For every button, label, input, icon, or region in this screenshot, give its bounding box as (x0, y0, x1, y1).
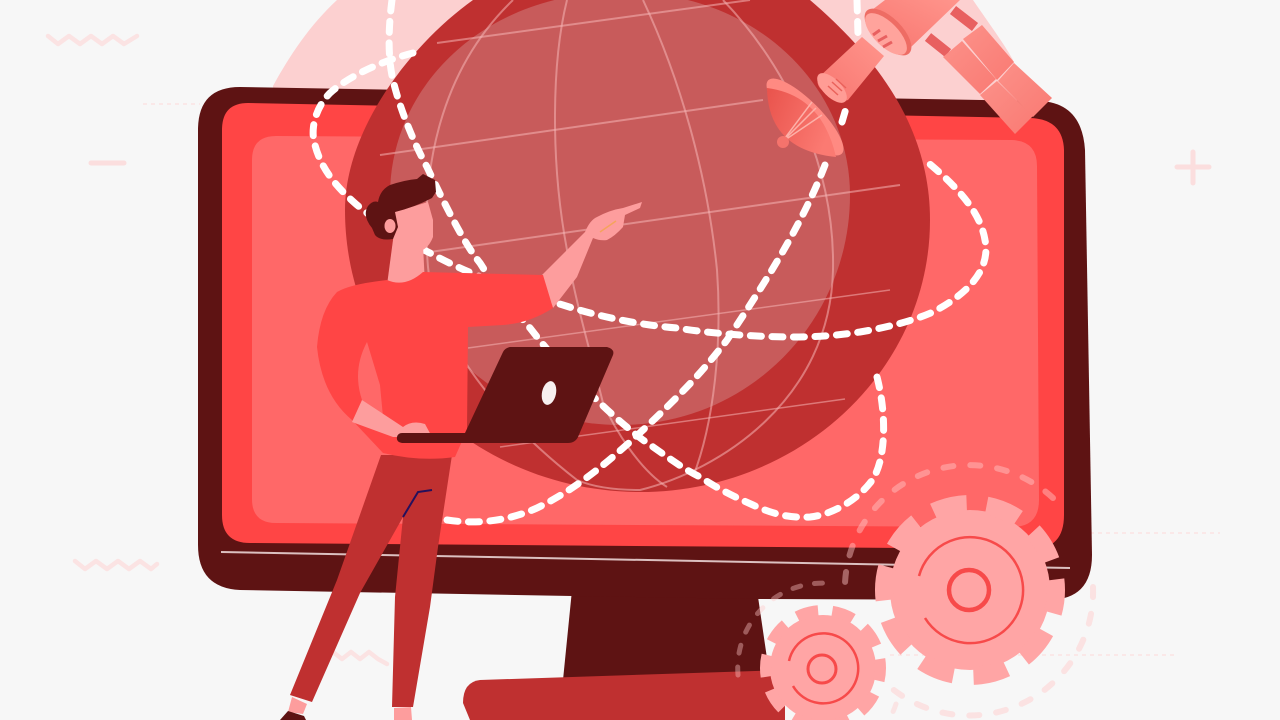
arm gap (358, 342, 383, 417)
pants crease (403, 490, 432, 517)
arm pointing (542, 202, 642, 308)
satellite (757, 0, 1052, 165)
monitor bezel line (221, 552, 1070, 568)
large gear arcs (919, 537, 1023, 643)
globe inner lighter disc (390, 0, 850, 425)
ear (384, 219, 396, 233)
finger detail (600, 221, 616, 232)
dish antenna (782, 102, 822, 142)
neck (387, 240, 425, 285)
shirt (317, 272, 553, 459)
pale backdrop shape (273, 0, 1030, 105)
laptop (397, 347, 613, 443)
monitor frame (198, 87, 1092, 600)
solar panel connectors (928, 10, 975, 53)
dish rim (757, 69, 853, 165)
face (393, 202, 433, 252)
monitor screen inner (252, 136, 1039, 527)
orbit paths (313, 0, 986, 522)
forearm (352, 400, 432, 437)
satellite rear body end (857, 1, 919, 63)
monitor screen edge (222, 103, 1064, 549)
person (280, 174, 642, 720)
small gear (757, 602, 889, 720)
laptop logo (540, 380, 558, 406)
pants (290, 455, 452, 707)
ankles (288, 697, 412, 720)
satellite front body (818, 37, 884, 101)
globe outer sphere (345, 0, 930, 492)
satellite joint (873, 30, 892, 47)
dish bowl (767, 88, 836, 157)
satellite rear body (868, 0, 960, 48)
small gear dashed ring (738, 583, 896, 720)
globe (345, 0, 930, 492)
solar panels (943, 25, 1052, 134)
hair (366, 174, 436, 240)
small gear arcs (789, 633, 858, 703)
satellite front body end (812, 68, 852, 108)
globe grid lines (380, 0, 900, 490)
large gear (874, 494, 1066, 686)
background decorations (48, 36, 1220, 664)
monitor base (463, 670, 785, 720)
large gear dashed ring (845, 465, 1093, 715)
monitor stand (563, 590, 769, 680)
shoe (280, 711, 306, 720)
